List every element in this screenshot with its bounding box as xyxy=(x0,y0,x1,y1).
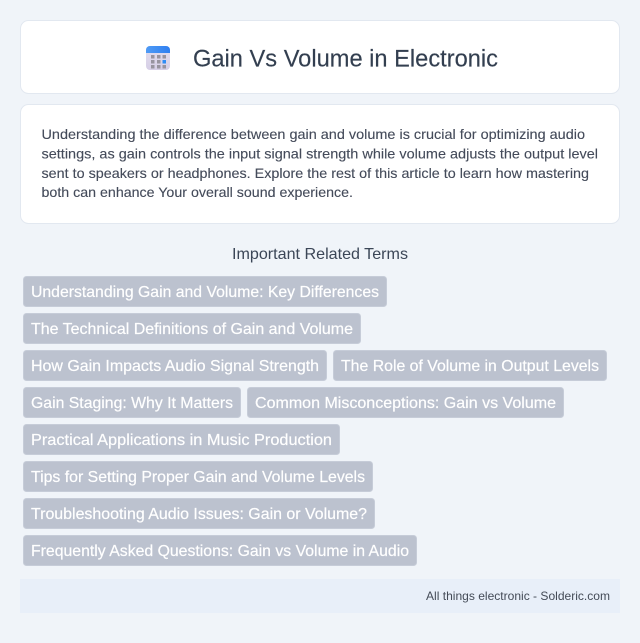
tag: output levels: The Role of Volume in Output Levels xyxy=(341,358,599,375)
tag: faq xyxy=(24,536,416,566)
title: Gain Vs Volume in Electronic xyxy=(193,46,498,72)
tag: misconceptions: Common Misconceptions: Gain vs Volume xyxy=(255,395,556,412)
footer: All things electronic - Solderic.com xyxy=(426,589,610,603)
panel: introduction text: settings, as gain controls the input signal strength while volume adjusts the output level xyxy=(42,146,598,162)
panel: introduction text xyxy=(20,104,620,224)
tag: music production xyxy=(24,424,340,454)
tag: setting levels xyxy=(24,462,372,492)
heading: related terms: Important Related Terms xyxy=(232,246,408,263)
tag: key differences xyxy=(24,276,386,306)
tag: troubleshooting xyxy=(24,498,374,528)
tag: technical definitions xyxy=(24,314,360,344)
icon: calendar grid xyxy=(146,46,170,70)
tag: setting levels: Tips for Setting Proper Gain and Volume Levels xyxy=(31,469,365,486)
panel: introduction text: both can enhance Your overall sound experience. xyxy=(42,184,353,200)
tag: signal strength xyxy=(24,350,326,380)
tag: output levels xyxy=(334,350,606,380)
tag: signal strength: How Gain Impacts Audio Signal Strength xyxy=(31,358,319,375)
tag: gain staging: Gain Staging: Why It Matters xyxy=(31,395,233,412)
tag: music production: Practical Applications in Music Production xyxy=(31,432,332,449)
tag: key differences: Understanding Gain and Volume: Key Differences xyxy=(31,284,379,301)
tag: misconceptions xyxy=(248,388,564,418)
tag: faq: Frequently Asked Questions: Gain vs Volume in Audio xyxy=(31,543,409,560)
tag: troubleshooting: Troubleshooting Audio Issues: Gain or Volume? xyxy=(31,506,367,523)
panel: introduction text: Understanding the difference between gain and volume is crucial for optimizing audio xyxy=(42,126,585,142)
panel: title card xyxy=(20,20,620,94)
panel: introduction text: sent to speakers or headphones. Explore the rest of this article to learn how mastering xyxy=(42,165,589,181)
tag: technical definitions: The Technical Definitions of Gain and Volume xyxy=(31,321,353,338)
tag: gain staging xyxy=(24,388,240,418)
footer xyxy=(20,579,620,613)
